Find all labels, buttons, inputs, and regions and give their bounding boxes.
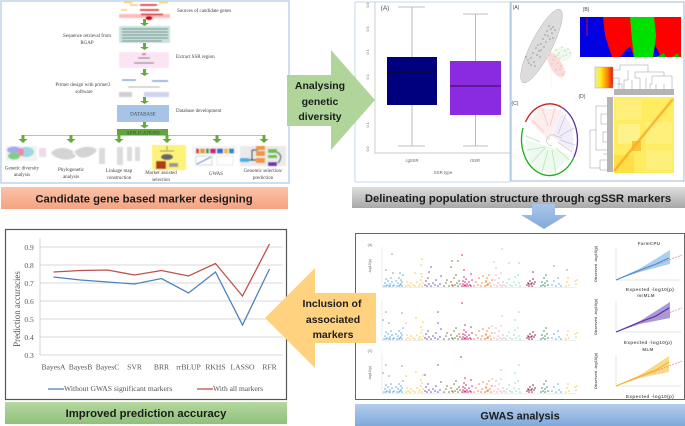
legend: With all markers <box>213 384 263 393</box>
flow step labels: Extract SSR region <box>176 55 215 60</box>
arrow: inclusion of associated markers: associated <box>306 314 360 326</box>
applications bar: APPLICATIONS <box>126 131 160 136</box>
flow step labels: Genetic diversity <box>5 166 40 172</box>
x axis labels: cgSSR <box>405 158 419 163</box>
Manhattan plot row 1: (A) <box>368 243 372 247</box>
y axis labels: 0.5 <box>24 315 34 324</box>
x axis labels <box>41 362 278 372</box>
chart: structure bar plot <box>580 7 681 57</box>
legend <box>48 384 263 393</box>
QQ plot: mrMLM: Observed -log10(p) <box>593 298 598 335</box>
flow step labels: Genomic selection/ <box>244 169 283 174</box>
y axis labels: 0.7 <box>24 279 34 288</box>
icon: linkage map <box>99 147 140 165</box>
box: cgSSR <box>387 7 437 146</box>
Manhattan plot row 2 <box>382 300 577 340</box>
QQ plot: FarmCPU <box>593 241 682 293</box>
x axis labels: LASSO <box>230 362 255 372</box>
Manhattan plot row 1 <box>368 243 577 288</box>
image: SSR region <box>119 52 169 68</box>
QQ plot: FarmCPU: Expected -log10(p) <box>626 287 674 293</box>
QQ plot: MLM <box>593 347 682 400</box>
x axis labels: SSR type <box>434 170 453 175</box>
y axis labels <box>12 243 34 360</box>
y axis labels: 0.6 <box>24 297 34 306</box>
flow step labels: prediction <box>253 176 274 181</box>
flow step labels: Phylogenetic <box>58 168 85 173</box>
QQ plot: mrMLM: mrMLM <box>637 293 655 298</box>
heading: delineating population structure <box>352 187 685 208</box>
y axis ticks: 0.0 <box>366 146 370 152</box>
x axis labels: RKHS <box>205 362 226 372</box>
y axis ticks: 0.4 <box>366 50 370 54</box>
image: sources of candidate genes <box>119 2 170 20</box>
x axis labels: BayesB <box>69 362 92 372</box>
Manhattan plot row 3: -log10(p) <box>368 366 372 380</box>
Manhattan plot row 3: (C) <box>368 349 372 353</box>
flow step labels: selection <box>152 178 170 183</box>
y axis labels: 0.9 <box>24 243 34 252</box>
icon: genomic selection diagram <box>240 146 286 166</box>
flow step labels: Marker assisted <box>145 171 177 176</box>
flow step labels: Sources of candidate genes <box>177 9 231 14</box>
y axis labels: 0.4 <box>24 333 34 342</box>
heading: GWAS analysis <box>355 404 685 426</box>
flow step labels: analysis <box>63 175 79 180</box>
x axis labels: BRR <box>154 362 170 372</box>
panel: GWAS analysis <box>356 234 684 400</box>
heading: delineating population structure: Delineating population structure through cgSSR markers <box>365 193 671 205</box>
database box: DATABASE <box>130 112 156 118</box>
circular tree: (C) <box>512 101 519 107</box>
flow step labels: analysis <box>14 173 30 178</box>
heading: candidate gene based marker designing: Candidate gene based marker designing <box>35 194 253 206</box>
y axis ticks <box>366 2 370 152</box>
box: rSSR <box>450 14 501 146</box>
QQ plot: MLM: MLM <box>642 347 654 352</box>
y axis labels: 0.8 <box>24 261 34 270</box>
flow step labels: software <box>75 90 93 95</box>
arrow: inclusion of associated markers <box>265 268 376 368</box>
legend: Without GWAS significant markers <box>64 384 172 393</box>
flow step labels: Linkage map <box>106 169 133 174</box>
QQ plot: mrMLM <box>593 293 682 346</box>
heading: candidate gene based marker designing <box>1 187 288 209</box>
flow step labels: GWAS <box>209 172 223 177</box>
scatter: PCA ellipses <box>513 5 572 88</box>
image: sequence text block <box>119 26 170 43</box>
x axis labels: rrBLUP <box>176 362 201 372</box>
flow step labels: Sequence retrieval from <box>63 34 111 39</box>
panel: population structure <box>511 2 684 181</box>
QQ plot: mrMLM: Expected -log10(p) <box>624 340 672 346</box>
icon: genetic diversity scatter <box>6 146 46 161</box>
icon: phylogenetic tree <box>51 147 97 160</box>
chart: heatmap <box>614 97 674 173</box>
flow step labels <box>5 9 283 183</box>
x axis labels: BayesC <box>96 362 119 372</box>
scatter: PCA ellipses: (A) <box>513 5 520 11</box>
line: with all markers <box>54 244 270 296</box>
arrow: analysing genetic diversity <box>287 50 375 150</box>
panel: box plot <box>355 2 510 182</box>
arrow: down to GWAS <box>521 204 567 229</box>
Manhattan plot row 3 <box>368 349 577 394</box>
arrow: analysing genetic diversity: diversity <box>298 111 342 123</box>
dendrogram: left <box>579 94 613 172</box>
heading: improved prediction accuracy: Improved prediction accuracy <box>66 408 227 420</box>
heading: improved prediction accuracy <box>5 402 287 424</box>
icon: GWAS plot <box>192 146 237 165</box>
flow arrows <box>18 19 268 143</box>
heading: GWAS analysis: GWAS analysis <box>480 410 560 422</box>
x axis labels <box>405 158 480 175</box>
icon: marker assisted selection <box>152 145 186 170</box>
x axis labels: RFR <box>262 362 278 372</box>
QQ plot: MLM: Expected -log10(p) <box>626 394 674 400</box>
x axis labels: rSSR <box>470 158 480 163</box>
arrow: inclusion of associated markers: markers <box>313 329 354 341</box>
line: without GWAS significant markers <box>54 269 270 325</box>
circular tree <box>512 101 577 175</box>
QQ plot: FarmCPU: FarmCPU <box>638 241 660 246</box>
QQ plot: FarmCPU: Observed -log10(p) <box>593 245 598 282</box>
panel: box plot: (A) <box>381 5 389 12</box>
flow step labels: Database development <box>176 109 222 114</box>
panel: prediction accuracy line chart <box>6 230 286 400</box>
dendrogram: top <box>612 65 674 95</box>
arrow: inclusion of associated markers: Inclusion of <box>303 298 362 310</box>
image: primer design <box>119 80 169 97</box>
flow step labels: Primer design with primer3 <box>55 83 111 88</box>
dendrogram: left: (D) <box>579 94 586 100</box>
applications bar <box>22 129 265 136</box>
x axis labels: BayesA <box>41 362 66 372</box>
panel: candidate gene marker design flow <box>1 1 289 183</box>
arrow: analysing genetic diversity: genetic <box>302 96 339 108</box>
chart: structure bar plot: (B) <box>583 7 590 13</box>
arrow: analysing genetic diversity: Analysing <box>295 80 345 92</box>
gridlines and axes <box>40 247 283 355</box>
y axis labels: 0.3 <box>24 351 34 360</box>
heat key <box>595 67 613 88</box>
flow step labels: construction <box>107 176 132 181</box>
QQ plot: MLM: Observed -log10(p) <box>593 352 598 389</box>
database box <box>117 105 169 122</box>
y axis ticks: 0.3 <box>366 74 370 80</box>
Manhattan plot row 1: -log10(p) <box>368 259 372 273</box>
flow step labels: RGAP <box>80 41 94 46</box>
y axis ticks: 0.6 <box>366 2 370 8</box>
y axis ticks: 0.1 <box>366 122 370 128</box>
y axis labels: Prediction accuracies <box>12 271 22 347</box>
x axis labels: SVR <box>127 362 143 372</box>
y axis ticks: 0.5 <box>366 26 370 32</box>
